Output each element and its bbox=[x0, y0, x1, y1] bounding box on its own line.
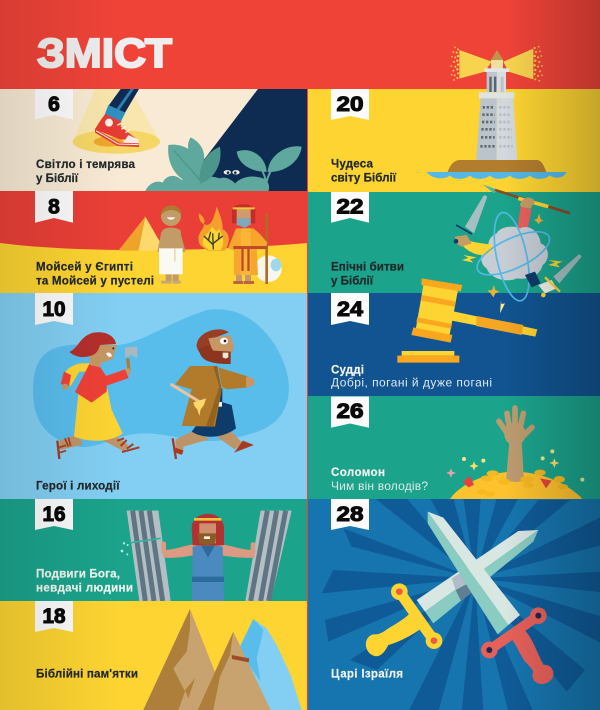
label: page 6: Світло і темрява bbox=[36, 158, 136, 171]
label: page 28: Царі Ізраїля bbox=[331, 668, 403, 680]
label: page 6 bbox=[36, 158, 136, 185]
label: page 8 bbox=[36, 260, 154, 288]
background blob bbox=[33, 309, 289, 447]
label: page 26: Соломон bbox=[331, 466, 385, 479]
ribbon number 8 bbox=[35, 191, 73, 223]
illustration: epic battle cloud bbox=[454, 184, 582, 313]
illustration: spotlight and sneaker bbox=[73, 89, 160, 154]
label: page 22: Епічні битви bbox=[331, 261, 404, 274]
label: page 10: Герої і лиходії bbox=[36, 480, 120, 492]
panel: page 8, Moses bbox=[0, 191, 307, 293]
ribbon number 6 bbox=[35, 89, 73, 120]
label: page 22: у Біблії bbox=[331, 274, 374, 287]
illustration: gavel bbox=[397, 278, 537, 363]
label: page 24 bbox=[331, 363, 492, 390]
label: page 24: Добрі, погані й дуже погані bbox=[331, 376, 492, 390]
ribbon number 28: 28 bbox=[336, 503, 364, 526]
ribbon number 20 bbox=[331, 89, 369, 120]
label: page 20 bbox=[331, 158, 397, 185]
ribbon number 10: 10 bbox=[42, 298, 66, 321]
label: page 6: у Біблії bbox=[36, 172, 79, 185]
label: page 20: Чудеса bbox=[331, 158, 374, 171]
illustration: crossed swords bbox=[366, 512, 553, 684]
label: page 22 bbox=[331, 261, 404, 287]
panel: page 22, epic battles bbox=[308, 192, 600, 293]
ribbon number 16 bbox=[35, 499, 73, 530]
illustration: arm and treasure bbox=[446, 408, 584, 500]
panel: page 24, judges bbox=[308, 278, 600, 396]
illustration: pyramid bbox=[118, 217, 165, 251]
ribbon number 6: 6 bbox=[48, 93, 60, 116]
ribbon number 18: 18 bbox=[42, 605, 66, 628]
illustration: broken pillars and Samson bbox=[121, 511, 292, 601]
label: page 20: світу Біблії bbox=[331, 172, 397, 185]
panel: page 16, Samson bbox=[0, 499, 307, 601]
ribbon number 8: 8 bbox=[48, 196, 60, 218]
ribbon number 26 bbox=[331, 396, 369, 428]
dark diagonal area bbox=[180, 89, 307, 191]
panel: page 26, Solomon bbox=[308, 396, 600, 500]
label: page 16: невдачі людини bbox=[36, 582, 133, 594]
ribbon number 28 bbox=[331, 499, 369, 530]
title: ЗМІСТ bbox=[37, 30, 172, 76]
header band bbox=[0, 0, 600, 89]
label: page 26: Чим він володів? bbox=[331, 479, 428, 493]
label: page 16 bbox=[36, 568, 133, 594]
figure: woman with axe bbox=[57, 332, 139, 459]
panel: page 10, heroes and villains bbox=[0, 293, 307, 499]
panel: page 28, kings of Israel bbox=[308, 498, 600, 710]
illustration: older Moses with staff bbox=[228, 204, 282, 284]
panel: page 20, wonders bbox=[308, 46, 600, 192]
illustration: burning bush bbox=[198, 207, 229, 251]
ribbon number 18 bbox=[35, 601, 73, 632]
illustration: lighthouse bbox=[427, 46, 567, 179]
label: page 8: та Мойсей у пустелі bbox=[36, 274, 154, 288]
ribbon number 24: 24 bbox=[337, 298, 363, 321]
ribbon number 10 bbox=[35, 293, 73, 325]
label: page 18: Біблійні пам'ятки bbox=[36, 668, 138, 680]
label: page 8: Мойсей у Єгипті bbox=[36, 260, 133, 274]
panel: page 6, light and darkness bbox=[0, 89, 307, 191]
ribbon number 22: 22 bbox=[336, 196, 364, 218]
figure: man with honey bbox=[172, 329, 255, 459]
illustration: mountains and water bbox=[143, 609, 302, 710]
label: page 16: Подвиги Бога, bbox=[36, 568, 120, 580]
label: page 24: Судді bbox=[331, 363, 364, 376]
illustration: plants and eyes bbox=[145, 137, 302, 191]
ribbon number 22 bbox=[331, 192, 369, 223]
ribbon number 26: 26 bbox=[336, 400, 364, 423]
yellow ground bbox=[0, 243, 307, 293]
ribbon number 16: 16 bbox=[42, 503, 66, 526]
illustration: young Moses bbox=[157, 205, 186, 284]
sunburst rays bbox=[322, 498, 600, 710]
panel: page 18, memorials bbox=[0, 601, 307, 710]
ribbon number 20: 20 bbox=[336, 93, 364, 116]
ribbon number 24 bbox=[331, 293, 369, 325]
label: page 26 bbox=[331, 466, 428, 493]
